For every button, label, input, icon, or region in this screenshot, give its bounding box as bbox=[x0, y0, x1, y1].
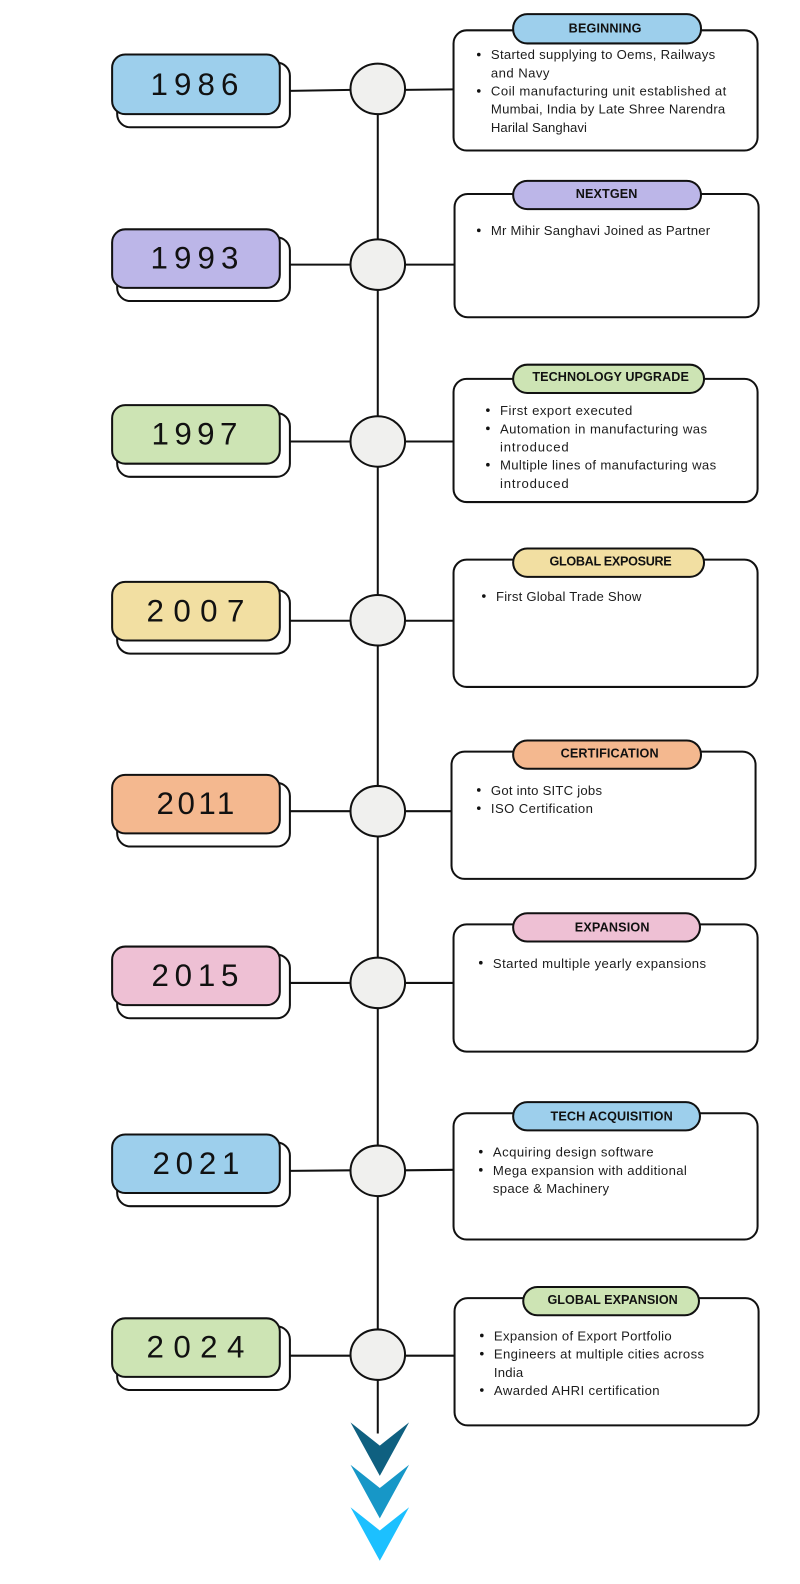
connector and node: 2024 bbox=[290, 1329, 455, 1380]
panel: global expansion: Expansion of Export Portfolio bbox=[494, 1329, 672, 1344]
timeline row: 2015 bbox=[112, 913, 758, 1052]
panel: beginning: Started supplying to Oems, Railways bbox=[491, 47, 716, 62]
year badge: 2024 bbox=[112, 1318, 290, 1390]
panel: tech acquisition: Mega expansion with additional bbox=[493, 1163, 687, 1178]
panel: certification: CERTIFICATION bbox=[561, 747, 659, 761]
year badge: 2011 bbox=[112, 775, 290, 847]
panel: global exposure: First Global Trade Show bbox=[496, 589, 642, 604]
panel: global expansion: Awarded AHRI certification bbox=[494, 1383, 660, 1398]
timeline row: 1997 bbox=[112, 365, 758, 502]
panel: expansion bbox=[454, 913, 758, 1052]
panel: global exposure: GLOBAL EXPOSURE bbox=[549, 555, 672, 569]
panel: certification: Got into SITC jobs bbox=[491, 783, 602, 798]
panel: beginning bbox=[454, 14, 758, 151]
panel: beginning: and Navy bbox=[491, 65, 550, 80]
year badge: 1986 bbox=[112, 55, 290, 127]
panel: certification bbox=[452, 740, 756, 879]
panel: technology upgrade: TECHNOLOGY UPGRADE bbox=[532, 370, 689, 384]
panel: expansion: EXPANSION bbox=[575, 920, 649, 934]
timeline row: 2024 bbox=[112, 1287, 759, 1425]
panel: nextgen bbox=[455, 181, 759, 317]
connector and node: 1997 bbox=[290, 416, 454, 467]
panel: expansion: Started multiple yearly expansions bbox=[493, 956, 706, 971]
panel: global expansion: GLOBAL EXPANSION bbox=[547, 1293, 678, 1307]
panel: technology upgrade: Automation in manufacturing was bbox=[500, 421, 708, 436]
panel: beginning: Mumbai, India by Late Shree Narendra bbox=[491, 102, 726, 117]
panel: global exposure bbox=[454, 549, 758, 687]
panel: beginning: Harilal Sanghavi bbox=[491, 120, 587, 135]
panel: beginning: Coil manufacturing unit established at bbox=[491, 83, 727, 98]
year badge: 2024: 2024 bbox=[146, 1330, 244, 1365]
connector and node: 1993 bbox=[290, 239, 455, 290]
panel: certification: ISO Certification bbox=[491, 801, 593, 816]
arrows: downward chevrons bbox=[351, 1422, 409, 1561]
panel: global expansion: Engineers at multiple cities across bbox=[494, 1347, 704, 1362]
panel: tech acquisition bbox=[454, 1102, 758, 1240]
panel: nextgen: Mr Mihir Sanghavi Joined as Partner bbox=[491, 223, 711, 238]
year badge: 2007: 2007 bbox=[146, 593, 244, 628]
timeline row: 1986 bbox=[112, 14, 758, 151]
timeline row: 2021 bbox=[112, 1102, 758, 1240]
panel: technology upgrade: First export executed bbox=[500, 403, 632, 418]
timeline row: 1993 bbox=[112, 181, 759, 317]
year badge: 1993 bbox=[112, 229, 290, 301]
year badge: 1986: 1986 bbox=[151, 67, 238, 102]
panel: global expansion: India bbox=[494, 1365, 524, 1380]
year badge: 1993: 1993 bbox=[151, 241, 238, 276]
timeline row: 2007 bbox=[112, 549, 758, 687]
panel: technology upgrade: Multiple lines of manufacturing was bbox=[500, 458, 717, 473]
year badge: 1997 bbox=[112, 405, 290, 477]
panel: beginning: BEGINNING bbox=[569, 21, 642, 35]
panel: technology upgrade: introduced bbox=[500, 440, 569, 455]
panel: technology upgrade: introduced bbox=[500, 476, 569, 491]
year badge: 2021: 2021 bbox=[153, 1146, 239, 1181]
panel: tech acquisition: space & Machinery bbox=[493, 1181, 610, 1196]
panel: global expansion bbox=[455, 1287, 759, 1425]
year badge: 2021 bbox=[112, 1134, 290, 1206]
panel: technology upgrade bbox=[454, 365, 758, 502]
year badge: 2011: 2011 bbox=[157, 786, 234, 821]
year badge: 2015: 2015 bbox=[152, 958, 238, 993]
panel: tech acquisition: Acquiring design software bbox=[493, 1145, 654, 1160]
panel: nextgen: NEXTGEN bbox=[576, 187, 637, 201]
panel: tech acquisition: TECH ACQUISITION bbox=[551, 1109, 673, 1123]
connector and node: 2011 bbox=[290, 786, 452, 836]
connector and node: 1986 bbox=[290, 64, 454, 114]
connector and node: 2015 bbox=[290, 958, 454, 1008]
year badge: 1997: 1997 bbox=[152, 416, 237, 451]
year badge: 2015 bbox=[112, 947, 290, 1018]
connector and node: 2021 bbox=[290, 1146, 454, 1196]
year badge: 2007 bbox=[112, 582, 290, 654]
timeline row: 2011 bbox=[112, 740, 756, 879]
connector and node: 2007 bbox=[290, 595, 454, 646]
timeline spine bbox=[377, 111, 379, 1433]
